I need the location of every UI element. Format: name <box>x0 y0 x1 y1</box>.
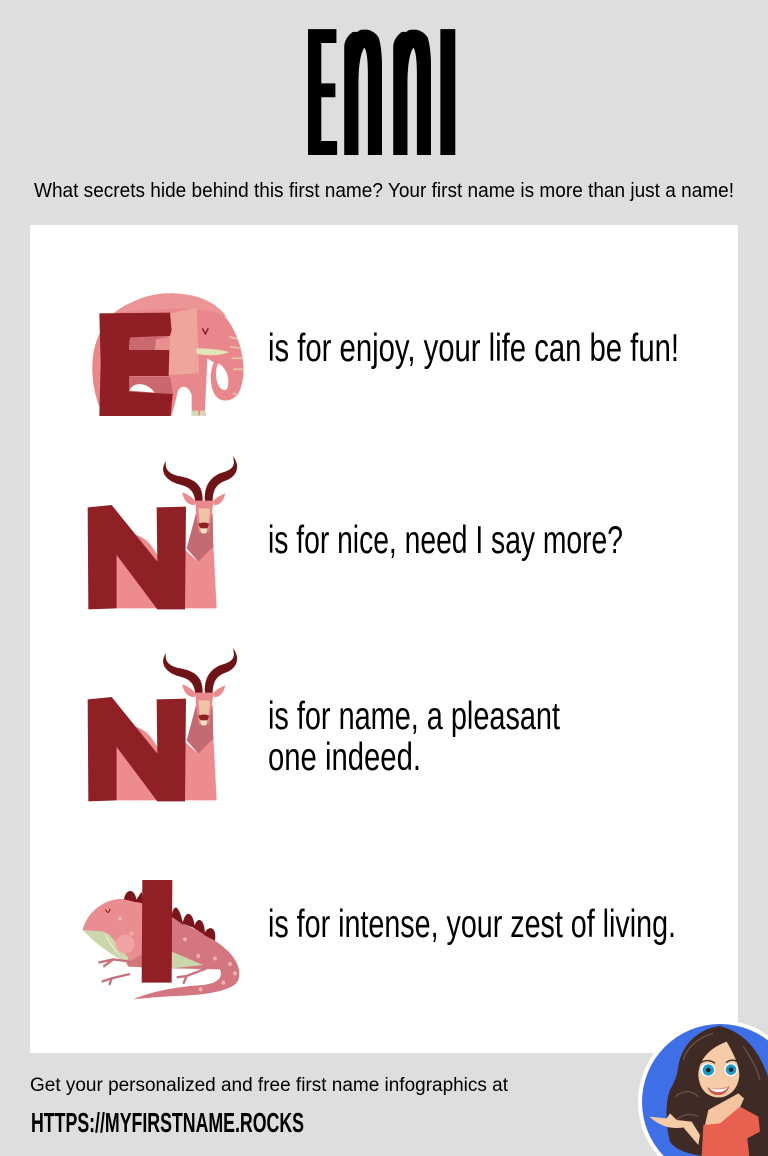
footer text: Get your personalized and free first name infographics at <box>30 1075 509 1096</box>
text: second letter N line: one indeed. <box>268 736 421 779</box>
panel: white card <box>30 225 738 1053</box>
icon: gazelle with letter N (first) <box>88 456 237 609</box>
icon: elephant with letter E <box>92 293 244 416</box>
text: second letter N line: is for name, a pleasant <box>268 695 560 738</box>
text: second letter N line <box>268 695 560 779</box>
title <box>308 29 456 155</box>
text: first letter N line: is for nice, need I say more? <box>268 519 623 562</box>
avatar: woman in blue circle <box>638 1020 768 1156</box>
subtitle: What secrets hide behind this first name? Your first name is more than just a name! <box>34 180 734 202</box>
icon: iguana with letter I <box>83 880 239 999</box>
icon: gazelle with letter N (second) <box>88 648 237 801</box>
footer url: HTTPS://MYFIRSTNAME.ROCKS <box>31 1107 304 1138</box>
